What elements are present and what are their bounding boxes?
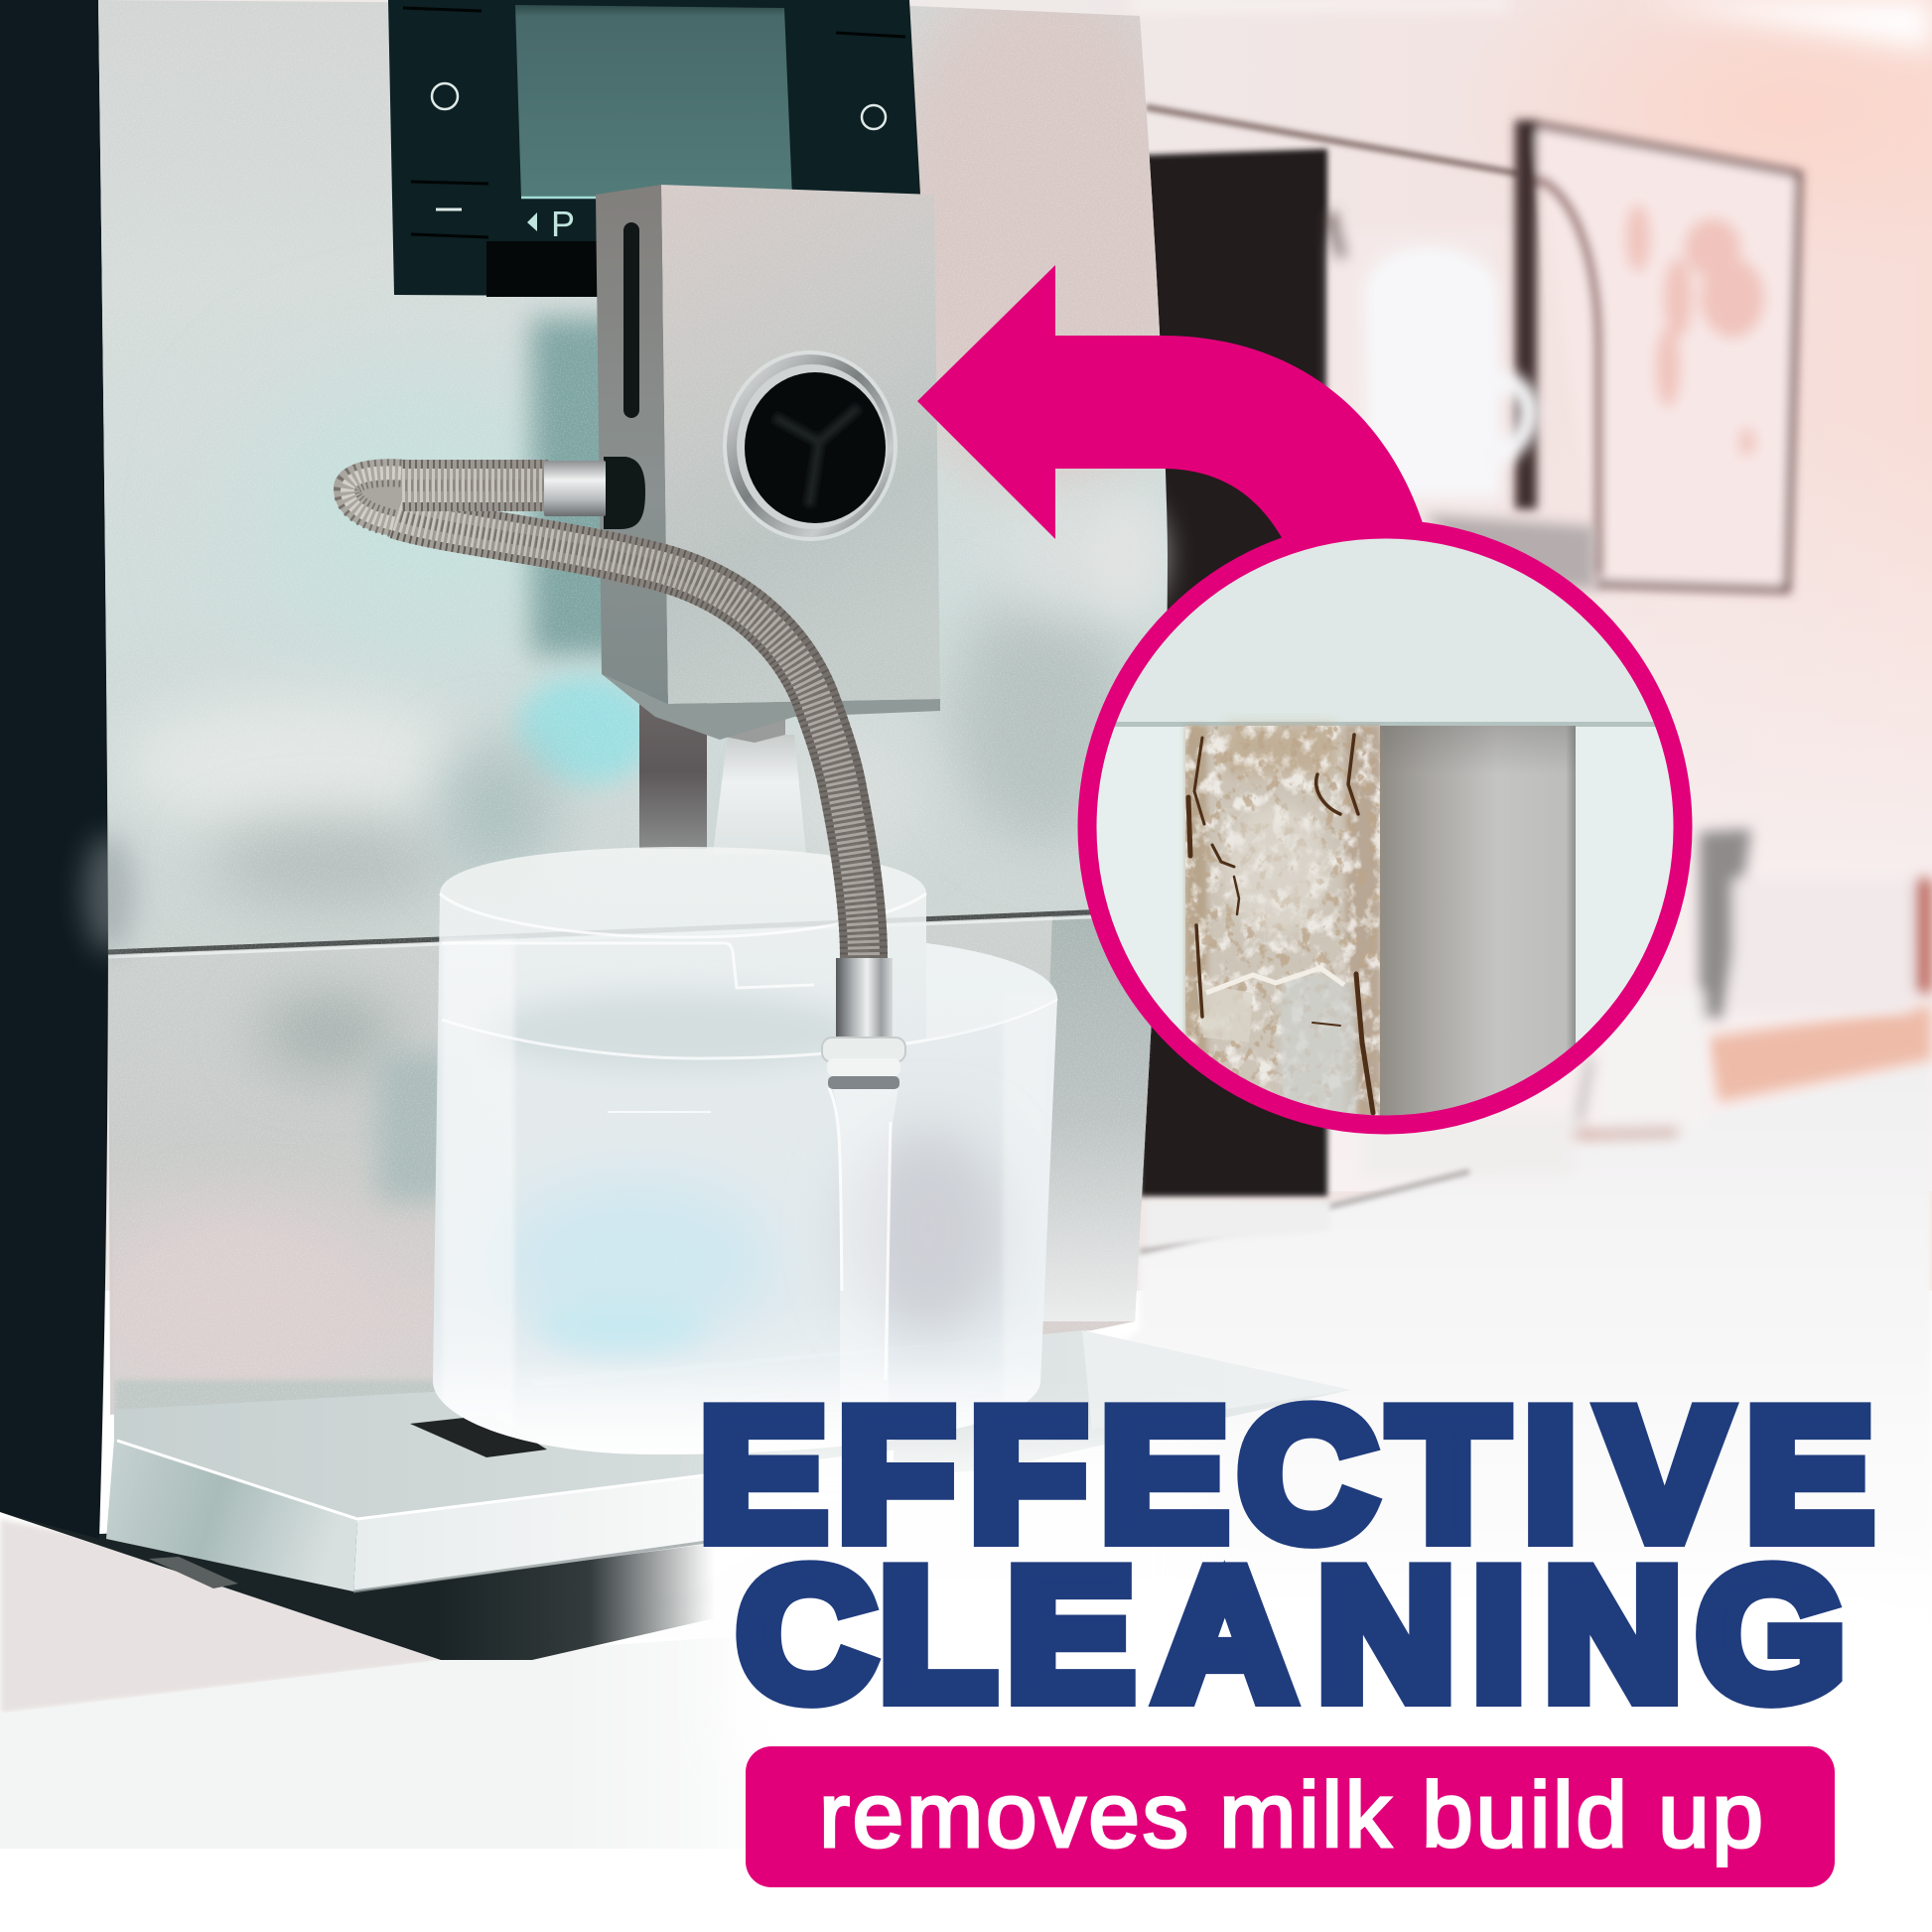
spout column (639, 695, 707, 849)
nozzle cone (713, 735, 806, 854)
front upper panel (98, 0, 1211, 953)
drip tray (106, 1330, 1350, 1591)
head slot (623, 222, 639, 418)
blurred right cups (1360, 829, 1932, 1177)
control display (388, 0, 923, 298)
hose ferrule bottom (836, 958, 893, 1041)
counter back edge (1140, 1172, 1469, 1252)
jug rims (440, 894, 1057, 1112)
dirty tube with milk build-up (1185, 726, 1380, 1135)
tagline text: removes milk build up (819, 1763, 1763, 1866)
steam and white fade (0, 496, 1932, 1932)
hose lower run (397, 515, 864, 958)
headline (700, 1371, 1873, 1738)
blurred cup on shelf (1330, 213, 1529, 516)
knob (723, 350, 897, 541)
display letter: P (551, 204, 575, 244)
headline line 1: EFFECTIVE (700, 1371, 1873, 1579)
magnified callout circle (1077, 516, 1693, 1135)
machine base shadow (0, 1509, 715, 1660)
black cabinet block (1140, 149, 1327, 1196)
bottom left counter (0, 1519, 456, 1714)
circle ring (1087, 529, 1683, 1125)
picture frame (1515, 120, 1799, 590)
hose bend (334, 459, 407, 539)
clear tube (822, 1037, 905, 1410)
map print in frame (1626, 205, 1764, 456)
spout head (596, 185, 940, 740)
shelf rod (1146, 107, 1519, 174)
pink curved arrow (917, 265, 1424, 541)
hose connector (604, 457, 645, 529)
hose ferrule top (544, 461, 606, 516)
display button circles (432, 83, 886, 129)
orange board (1708, 1006, 1932, 1102)
black body left (0, 0, 108, 1539)
milk jug (433, 847, 1058, 1454)
front lower panel (108, 911, 1158, 1422)
grain on panels (98, 0, 1168, 1430)
counter (0, 1062, 1932, 1932)
coffee machine (0, 0, 1350, 1660)
grey shelf (1425, 514, 1595, 590)
panel seam (108, 909, 1158, 952)
headline line 2: CLEANING (737, 1531, 1846, 1738)
hose upper run (402, 460, 548, 511)
pink tagline pill (746, 1746, 1835, 1887)
braided milk hose (334, 459, 864, 958)
clean steel tube (1380, 726, 1576, 1135)
